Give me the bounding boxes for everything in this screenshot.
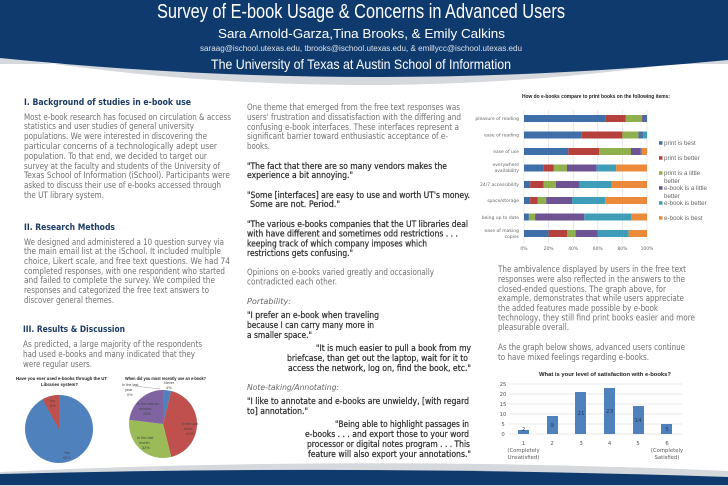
- row labels: ease of making: [484, 228, 519, 234]
- value labels: 5: [665, 427, 669, 433]
- quotes: annotating: to] annotation.": [247, 406, 308, 416]
- quotes: interfaces: keeping track of which company imposes which: [247, 238, 427, 248]
- chart: pie, used e-books: 92%: [63, 456, 71, 460]
- text: background body: statistics and user studies of general university: [24, 121, 194, 131]
- text: ambivalence: closed-ended questions. The graph above, for: [498, 284, 666, 294]
- chart: pie, most recent use: In the last six: [137, 402, 159, 406]
- text: ambivalence: the added features made possible by e-book: [498, 303, 658, 313]
- axis labels: 15: [500, 402, 506, 408]
- text: methods body: completed responses, with one respondent who started: [24, 266, 225, 276]
- axis labels: 5: [636, 441, 640, 447]
- axis labels: 2: [550, 441, 554, 447]
- value labels: [522, 409, 669, 433]
- row labels: copies: [505, 234, 520, 240]
- axis labels: 1: [522, 441, 525, 447]
- text: background body: [23, 112, 231, 200]
- axis labels: 3: [579, 441, 583, 447]
- text: ambivalence: As the graph below shows, advanced users continue: [498, 342, 685, 352]
- text: ambivalence: The ambivalence displayed by users in the free text: [497, 264, 687, 274]
- text: ambivalence: pleasurable overall.: [498, 322, 569, 332]
- chart: pie, most recent use: year: [125, 388, 133, 392]
- text: background body: particular concerns of a technologically adept user: [24, 141, 217, 151]
- text: free text intro: [247, 102, 461, 151]
- title: Survey of E-book Usage & Concerns in Advanced Users: [157, 1, 565, 23]
- text: ambivalence: responses were also reflected in the answers to the: [498, 274, 685, 284]
- text: methods body: the main email list at the iSchool. It included multiple: [24, 246, 221, 256]
- panel: free text themes: [247, 102, 471, 459]
- text: methods body: We designed and administered a 10 question survey via: [24, 237, 224, 247]
- text: free text intro: books.: [247, 141, 270, 151]
- axis labels: 60%: [593, 246, 604, 252]
- chart: pie, used e-books: Have you ever used e-books through the UT: [16, 376, 107, 381]
- panel: methods: [24, 223, 230, 305]
- text: opinions: contradicted each other.: [247, 276, 337, 286]
- text: results body: [23, 339, 202, 369]
- chart: pie, used e-books: Libraries system?: [41, 382, 78, 387]
- legend: better: [664, 178, 680, 185]
- footer band: [0, 463, 728, 486]
- institution: The University of Texas at Austin School of Information: [211, 56, 511, 72]
- text: methods body: responses and categorized the free text answers to: [24, 285, 209, 295]
- text: background body: population. To that end, we decided to target our: [24, 151, 207, 161]
- row labels: space/storage: [487, 198, 519, 204]
- quotes: portability: "It is much easier to pull a book from my: [316, 343, 471, 353]
- legend: print is better: [664, 155, 700, 162]
- text: free text intro: One theme that emerged from the free text responses was: [247, 102, 460, 112]
- axis labels: 5: [501, 422, 505, 428]
- quotes: portability: access the network, log on, find the book, etc.": [288, 363, 471, 373]
- quotes: interfaces: [247, 161, 470, 258]
- axis labels: 0%: [520, 246, 528, 252]
- text: methods body: discover general themes.: [24, 295, 114, 305]
- quotes: annotating: "I like to annotate and e-books are unwieldy, [with regard: [247, 396, 469, 406]
- heading: methods: II. Research Methods: [24, 223, 115, 233]
- axis labels: Unsatisfied): [508, 455, 539, 461]
- row labels: [475, 116, 520, 240]
- quotes: portability: briefcase, than get out the laptop, wait for it to: [287, 353, 468, 363]
- chart: pie, most recent use: [122, 376, 206, 458]
- chart title: What is your level of satisfaction with e-books?: [539, 372, 671, 378]
- axis labels: 20%: [544, 246, 554, 252]
- value labels: 2: [522, 427, 525, 433]
- subheading: annotating: Note-taking/Annotating:: [247, 382, 339, 392]
- row labels: 24/7 accessibility: [480, 182, 519, 188]
- quotes: portability: because I can carry many more in: [247, 320, 374, 330]
- chart: pie, most recent use: month: [139, 441, 150, 445]
- chart: pie, most recent use: week: [184, 427, 193, 431]
- text: results body: had used e-books and many indicated that they: [23, 349, 195, 359]
- panel: background: [23, 98, 231, 200]
- axis labels: 4: [608, 441, 612, 447]
- quotes: interfaces: Some are not. Period.": [250, 199, 340, 209]
- row labels: everywhere: [492, 162, 519, 168]
- text: ambivalence: [497, 264, 695, 362]
- row labels: ease of reading: [484, 132, 519, 138]
- row labels: being up to date: [482, 215, 519, 221]
- chart: pie, most recent use: 23%: [143, 412, 151, 416]
- quotes: interfaces: "The various e-books companies that the UT libraries deal: [247, 219, 468, 229]
- chart: pie, most recent use: 4%: [166, 386, 172, 390]
- quotes: annotating: [247, 396, 471, 459]
- chart: pie, most recent use: months: [139, 407, 152, 411]
- axis labels: [500, 382, 683, 461]
- quotes: annotating: processor or digital notes program . . . This: [307, 439, 470, 449]
- axis labels: (Completely: [651, 448, 683, 454]
- chart: satisfaction bars: [500, 372, 683, 461]
- legend: print is best: [664, 140, 696, 147]
- heading: background: I. Background of studies in e-book use: [24, 98, 191, 108]
- axis labels: 100%: [641, 246, 654, 252]
- legend: e-book is best: [664, 215, 703, 222]
- chart: pie, most recent use: 41%: [186, 432, 194, 436]
- text: free text intro: significant barrier toward enthusiastic acceptance of e-: [247, 131, 448, 141]
- legend: [659, 140, 708, 222]
- legend: print is a little: [664, 170, 701, 177]
- text: methods body: [24, 237, 230, 305]
- value labels: 9: [550, 423, 554, 429]
- quotes: interfaces: "Some [interfaces] are easy to use and worth UT's money.: [247, 190, 470, 200]
- quotes: portability: "I prefer an e-book when traveling: [247, 310, 379, 320]
- chart: pie, most recent use: 32%: [142, 446, 150, 450]
- legend: e-book is a little: [664, 185, 708, 192]
- bars: [518, 388, 672, 434]
- axis labels: 0: [501, 432, 505, 438]
- text: background body: survey at the faculty and students of the University of: [24, 161, 221, 171]
- legend: better: [664, 193, 680, 200]
- chart: pie, most recent use: In the last: [122, 383, 139, 387]
- chart: pie, most recent use: In the last: [182, 422, 199, 426]
- value labels: 21: [577, 411, 585, 417]
- heading: results: III. Results & Discussion: [23, 325, 125, 335]
- row labels: ease of use: [493, 149, 519, 155]
- quotes: portability: a smaller space.": [247, 330, 312, 340]
- axis labels: 40%: [568, 246, 579, 252]
- text: background body: Texas School of Information (iSchool). Participants were: [23, 170, 230, 180]
- chart: pie, used e-books: 8%: [50, 404, 56, 408]
- chart: pie, used e-books: No: [50, 399, 55, 403]
- axis labels: 25: [500, 382, 506, 388]
- chart: pie, most recent use: 0%: [127, 393, 133, 397]
- text: methods body: choice, Likert scale, and free text questions. We had 74: [24, 256, 230, 266]
- axis labels: 10: [500, 412, 507, 418]
- row labels: availability: [495, 168, 519, 174]
- text: methods body: and failed to complete the survey. We compiled the: [24, 275, 215, 285]
- quotes: interfaces: "The fact that there are so many vendors makes the: [247, 161, 447, 171]
- text: results body: were regular users.: [23, 359, 92, 369]
- text: free text intro: users' frustration and dissatisfaction with the differing and: [247, 112, 461, 122]
- text: opinions: Opinions on e-books varied greatly and occasionally: [247, 267, 434, 277]
- chart: stacked bars, e-books vs print: [475, 94, 708, 252]
- chart: pie, most recent use: Never: [164, 381, 175, 385]
- text: ambivalence: to have mixed feelings regarding e-books.: [498, 352, 649, 362]
- chart title: How do e-books compare to print books on the following items:: [522, 94, 670, 100]
- text: free text intro: confusing e-book interfaces. These interfaces represent a: [247, 122, 459, 132]
- text: ambivalence: technology, they still find print books easier and more: [498, 312, 695, 322]
- authors: Sara Arnold-Garza,Tina Brooks, & Emily Calkins: [218, 26, 506, 41]
- axis labels: (Completely: [507, 448, 540, 454]
- chart: pie, used e-books: [16, 376, 107, 463]
- panel: results: [23, 325, 202, 369]
- text: background body: asked to discuss their use of e-books accessed through: [24, 180, 221, 190]
- quotes: portability: [247, 310, 471, 373]
- axis labels: 80%: [617, 246, 628, 252]
- quotes: annotating: "Being able to highlight passages in: [335, 419, 469, 429]
- quotes: annotating: e-books . . . and export those to your word: [305, 429, 469, 439]
- text: results body: As predicted, a large majority of the respondents: [23, 339, 202, 349]
- subheading: portability: Portability:: [247, 296, 291, 306]
- axis labels: Satisfied): [655, 455, 679, 461]
- value labels: 14: [634, 418, 642, 424]
- quotes: annotating: feature will also export your annotations.": [308, 449, 471, 459]
- emails: saraag@ischool.utexas.edu, tbrooks@ischool.utexas.edu, & emillycc@ischool.utexas.edu: [200, 44, 522, 53]
- chart: pie, most recent use: When did you most recently use an e-book?: [125, 376, 206, 381]
- quotes: interfaces: with have different and sometimes odd restrictions . . .: [247, 228, 458, 238]
- stacked bars: [524, 115, 647, 237]
- legend: e-book is better: [664, 200, 707, 207]
- quotes: interfaces: experience a bit annoying.": [247, 170, 353, 180]
- text: opinions: [247, 267, 434, 286]
- value labels: 23: [606, 409, 613, 415]
- chart: pie, most recent use: In the last: [137, 436, 154, 440]
- axis labels: 20: [500, 392, 507, 398]
- axis labels: 6: [665, 441, 669, 447]
- axis labels: [520, 246, 654, 252]
- text: ambivalence: example, demonstrates that while users appreciate: [498, 293, 684, 303]
- text: background body: populations. We were interested in discovering the: [24, 131, 207, 141]
- text: background body: Most e-book research has focused on circulation & access: [24, 112, 231, 122]
- row labels: pleasure of reading: [475, 116, 519, 122]
- quotes: interfaces: restrictions gets confusing.": [247, 248, 353, 258]
- chart: pie, used e-books: Yes: [64, 451, 70, 455]
- text: background body: the UT library system.: [24, 190, 104, 200]
- header banner: [0, 0, 728, 85]
